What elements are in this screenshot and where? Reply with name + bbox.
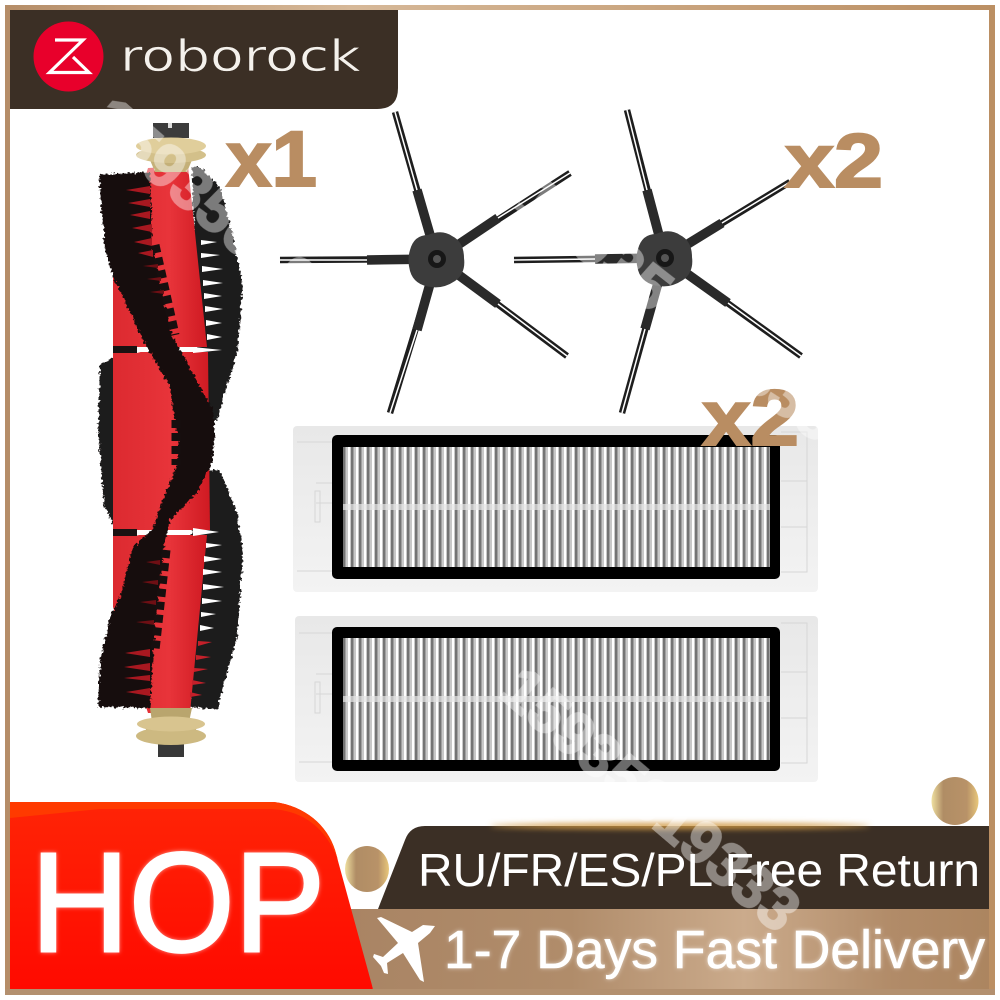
icon: roborock logo bbox=[34, 22, 104, 92]
brush bristles back bbox=[98, 167, 243, 710]
top collar bbox=[136, 123, 206, 172]
banner: delivery bbox=[345, 909, 989, 989]
badge text: HOP bbox=[31, 823, 325, 981]
filter tray bbox=[295, 616, 818, 782]
bottom collar bbox=[136, 708, 206, 757]
watermark upper left: 15935619333 bbox=[78, 84, 408, 384]
tray details bbox=[299, 623, 807, 763]
pleated media bbox=[343, 638, 770, 760]
red roller body bbox=[113, 166, 210, 713]
banner: free return bbox=[378, 823, 989, 909]
filter 2 bbox=[295, 616, 818, 782]
filter 1 bbox=[293, 426, 818, 592]
spiral bristle teeth bbox=[155, 245, 176, 650]
return text: RU/FR/ES/PL Free Return bbox=[418, 844, 980, 896]
decorative gold circle left bbox=[345, 846, 389, 892]
black frame bbox=[332, 627, 780, 771]
white comb gaps right bbox=[135, 240, 224, 631]
red comb gaps left bbox=[124, 186, 164, 696]
hub bbox=[408, 232, 464, 287]
main brush bbox=[98, 123, 243, 757]
side brush 2 bbox=[514, 110, 801, 413]
segment gaps bbox=[113, 346, 137, 536]
red badge bbox=[10, 802, 373, 989]
side brush 1 bbox=[280, 112, 570, 413]
brush arms bbox=[514, 110, 801, 413]
delivery text: 1-7 Days Fast Delivery bbox=[444, 920, 985, 980]
pleated media bbox=[343, 447, 770, 567]
arm slits bbox=[280, 112, 570, 413]
quantity label x1: x1 bbox=[226, 114, 317, 203]
filter tray bbox=[293, 426, 818, 592]
arm slits bbox=[514, 110, 801, 413]
icon: airplane bbox=[373, 917, 435, 982]
watermark upper right: 15935619333 bbox=[505, 163, 852, 455]
brush arms bbox=[280, 112, 570, 413]
quantity label x2 filter: x2 bbox=[702, 373, 799, 462]
pleat band bbox=[343, 696, 770, 702]
decorative gold circle right bbox=[932, 777, 978, 825]
spiral bristle strip upper bbox=[99, 172, 215, 440]
red comb gaps right bbox=[190, 641, 212, 697]
watermarks bbox=[78, 84, 852, 945]
black frame bbox=[332, 435, 780, 579]
gold glow bbox=[490, 823, 870, 829]
pleat band bbox=[343, 504, 770, 510]
hub bbox=[636, 231, 692, 286]
spiral bristle strip lower bbox=[98, 420, 215, 708]
watermark lower: 15935619333 bbox=[489, 654, 813, 945]
logo panel bbox=[10, 10, 398, 109]
quantity label x2 top: x2 bbox=[785, 119, 883, 204]
tray details bbox=[297, 432, 807, 572]
brand name: roborock bbox=[120, 31, 362, 82]
